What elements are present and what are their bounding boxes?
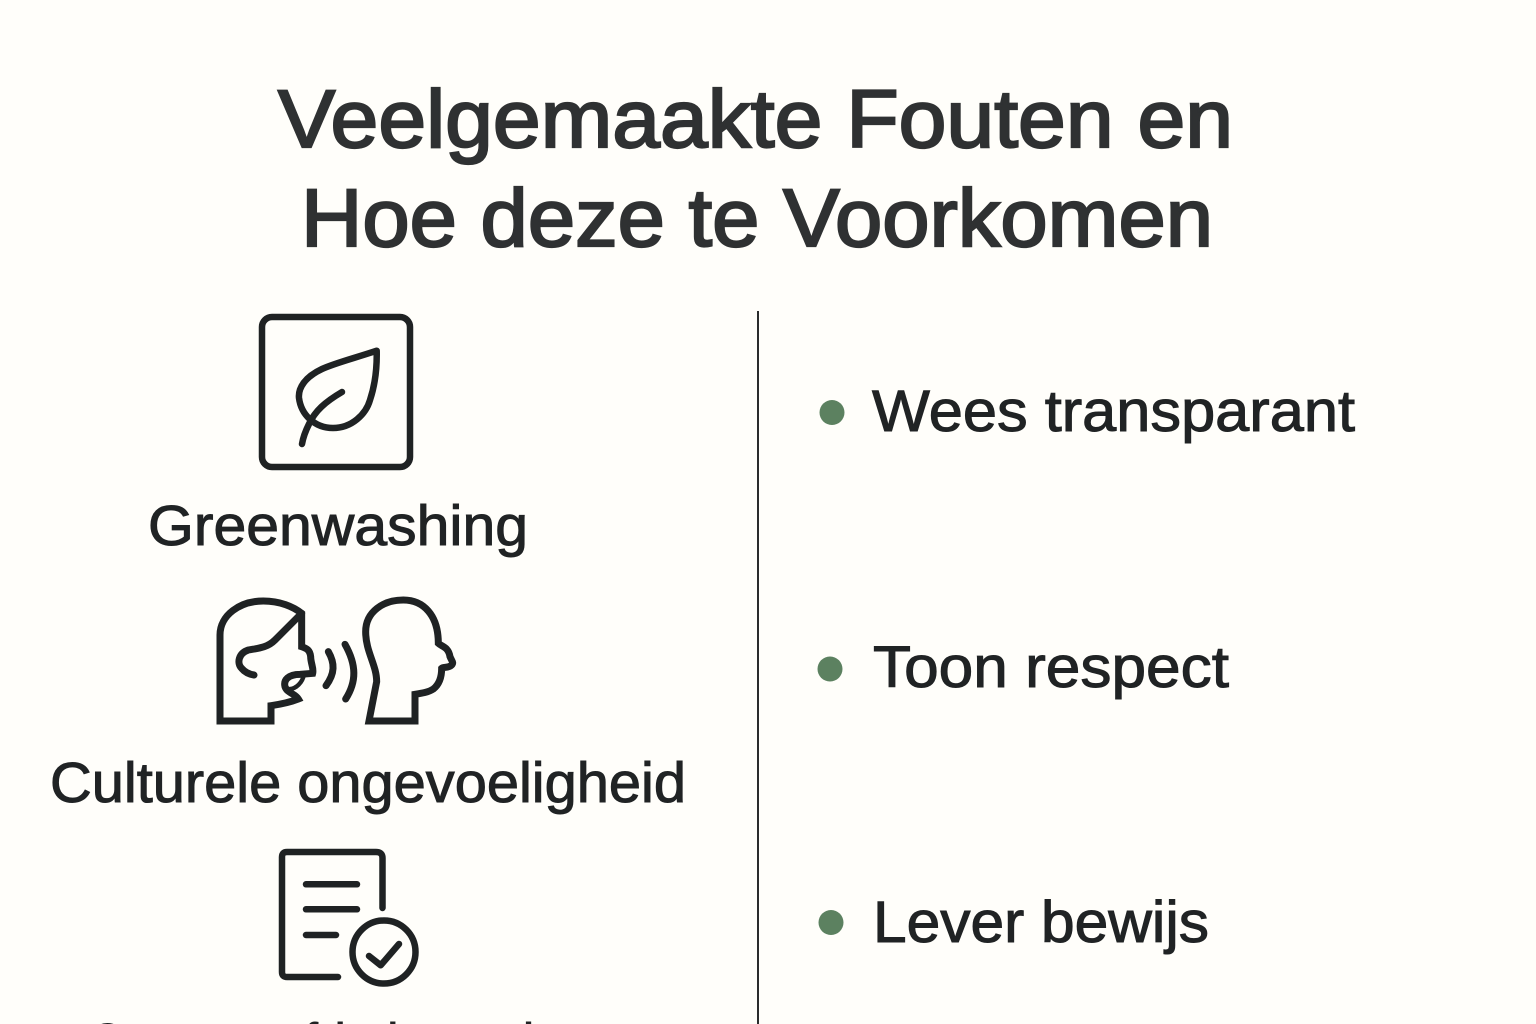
panel: mistakes <box>50 317 686 1024</box>
icon: document with check mark <box>282 852 416 984</box>
title <box>278 74 1233 264</box>
title: Hoe deze te Voorkomen <box>301 173 1213 264</box>
bullet item: Wees transparant: Wees transparant <box>872 379 1355 444</box>
icon: two heads speaking <box>220 600 453 721</box>
bullet item: Lever bewijs: Lever bewijs <box>873 890 1209 955</box>
label: Culturele ongevoeligheid: Culturele ongevoeligheid <box>50 751 686 815</box>
title: Veelgemaakte Fouten en <box>278 74 1233 165</box>
vertical divider <box>757 311 759 1024</box>
label: Greenwashing: Greenwashing <box>148 494 528 558</box>
bullet item: Toon respect: Toon respect <box>873 635 1229 700</box>
panel: solutions <box>818 379 1355 955</box>
icon: leaf in square <box>262 317 410 467</box>
